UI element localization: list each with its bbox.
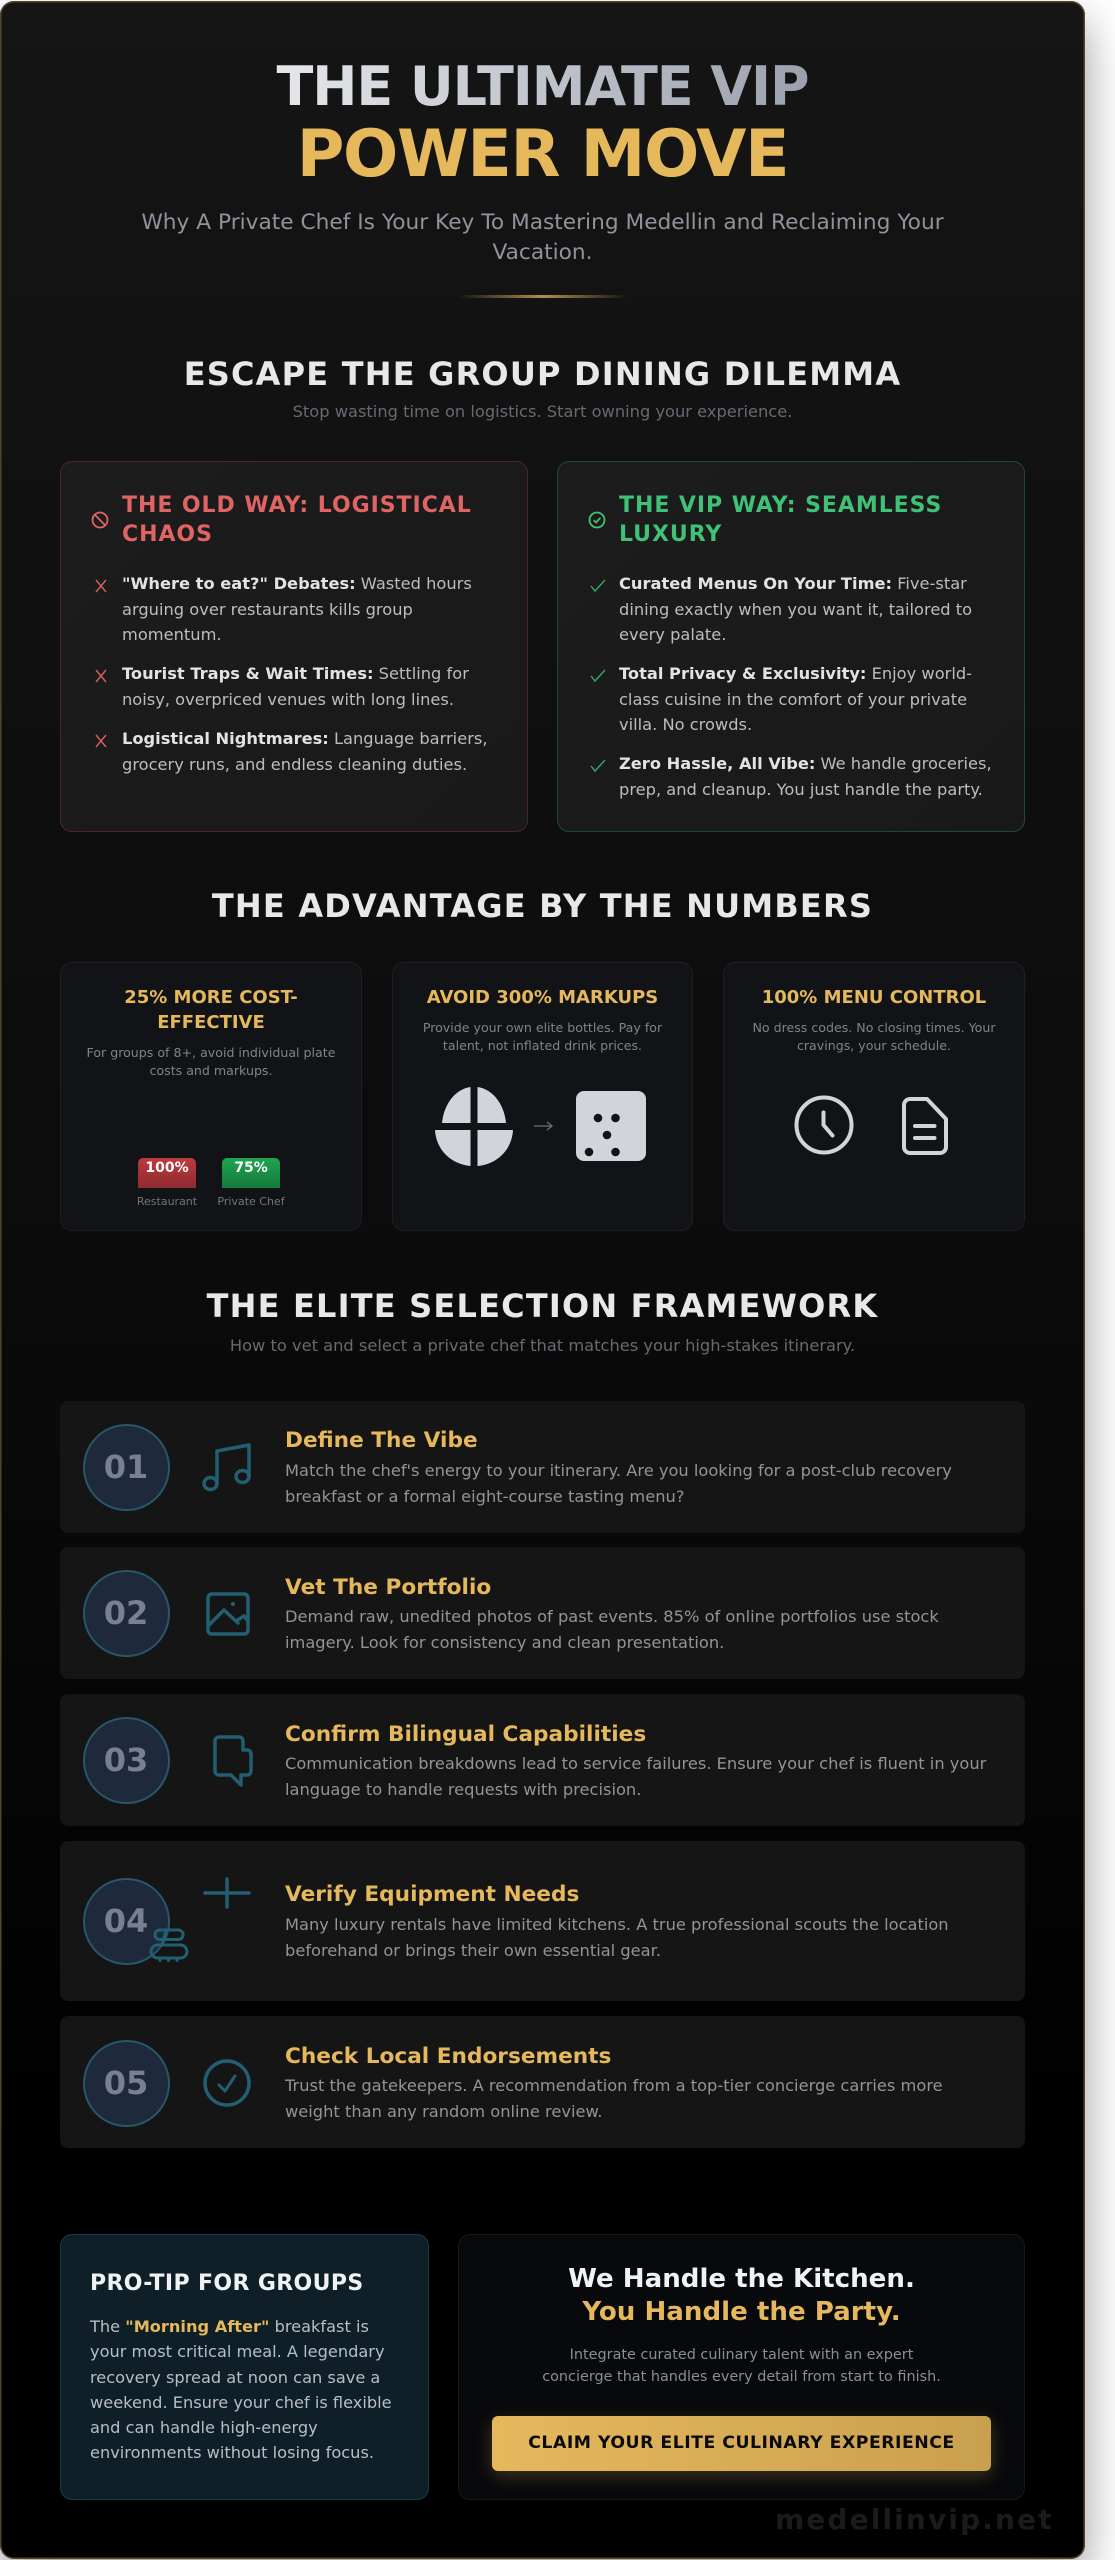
- step title: Check Local Endorsements: [285, 2044, 611, 2068]
- pro-tip heading: PRO-TIP FOR GROUPS: [90, 2271, 364, 2296]
- cta button: CLAIM YOUR ELITE CULINARY EXPERIENCE: [528, 2433, 955, 2453]
- item 3: grocery runs, and endless cleaning duties.: [122, 754, 467, 774]
- stat title: EFFECTIVE: [157, 1012, 265, 1033]
- pro-tip text: and can handle high-energy: [90, 2418, 318, 2437]
- panel: call to action: [458, 2234, 1025, 2500]
- step text: imagery. Look for consistency and clean presentation.: [285, 1633, 724, 1652]
- panel: old way: [60, 461, 528, 832]
- icon: clock: [794, 1096, 854, 1154]
- item 2: Tourist Traps & Wait Times: Settling for: [122, 664, 469, 683]
- number 01: [82, 1424, 170, 1511]
- pro-tip text: [90, 2317, 392, 2462]
- arrow: [534, 1122, 553, 1130]
- stat description: [423, 1020, 662, 1053]
- stat title: 25% MORE COST-: [124, 987, 298, 1008]
- old way title: [122, 492, 472, 546]
- subtitle: Vacation.: [492, 240, 593, 264]
- subtitle: [141, 210, 944, 264]
- item 1: dining exactly when you want it, tailored to: [619, 600, 972, 618]
- check 1: [590, 580, 606, 592]
- step text: Demand raw, unedited photos of past events. 85% of online portfolios use stock: [285, 1607, 939, 1626]
- stat description: cravings, your schedule.: [797, 1038, 951, 1053]
- pro-tip text: weekend. Ensure your chef is flexible: [90, 2393, 392, 2412]
- pro-tip text: your most critical meal. A legendary: [90, 2342, 385, 2361]
- stat card: cost: [60, 962, 362, 1231]
- section heading: framework: THE ELITE SELECTION FRAMEWORK: [207, 1287, 878, 1325]
- item 2: Total Privacy & Exclusivity: Enjoy world-: [619, 664, 972, 683]
- number 04: [82, 1878, 170, 1965]
- stat card: markups: [392, 962, 693, 1231]
- item 1: [122, 574, 472, 644]
- subtitle: Why A Private Chef Is Your Key To Mastering Medellin and Reclaiming Your: [141, 210, 944, 235]
- icon: plate: [435, 1087, 513, 1166]
- icon: music: [202, 1443, 251, 1492]
- section heading: dilemma: ESCAPE THE GROUP DINING DILEMMA: [184, 355, 901, 393]
- step text: Trust the gatekeepers. A recommendation from a top-tier concierge carries more: [285, 2076, 943, 2095]
- step title: Confirm Bilingual Capabilities: [285, 1722, 646, 1746]
- item 3: Logistical Nightmares: Language barriers,: [122, 729, 488, 748]
- stat description: Provide your own elite bottles. Pay for: [423, 1020, 662, 1035]
- private chef label: Private Chef: [217, 1195, 285, 1208]
- icon: check circle: [588, 512, 606, 528]
- restaurant bar: 100%: [145, 1160, 189, 1176]
- item 3: Zero Hassle, All Vibe: We handle groceries,: [619, 754, 992, 773]
- step text: [285, 1754, 986, 1799]
- section heading: numbers: THE ADVANTAGE BY THE NUMBERS: [212, 887, 873, 925]
- old way title: THE OLD WAY: LOGISTICAL: [122, 492, 472, 518]
- stat title: 100% MENU CONTROL: [762, 987, 986, 1008]
- stat title: [124, 987, 298, 1033]
- stat description: [87, 1045, 335, 1078]
- item 3: prep, and cleanup. You just handle the party.: [619, 780, 983, 798]
- step text: Communication breakdowns lead to service failures. Ensure your chef is fluent in your: [285, 1754, 986, 1773]
- stat title: AVOID 300% MARKUPS: [427, 987, 658, 1008]
- vip way title: [619, 492, 942, 546]
- stat description: [752, 1020, 996, 1053]
- step text: Many luxury rentals have limited kitchens. A true professional scouts the location: [285, 1915, 949, 1934]
- item 2: noisy, overpriced venues with long lines.: [122, 690, 454, 708]
- icon: check circle: [203, 2059, 251, 2107]
- step text: language to handle requests with precision.: [285, 1780, 641, 1799]
- step text: [284, 2076, 943, 2121]
- step 3: [60, 1694, 1025, 1826]
- number 04: 04: [104, 1902, 148, 1940]
- number 02: 02: [104, 1594, 148, 1632]
- check 2: [590, 670, 606, 682]
- item 1: "Where to eat?" Debates: Wasted hours: [122, 574, 472, 593]
- number 02: [82, 1570, 170, 1657]
- stat card: control: [723, 962, 1025, 1231]
- private chef bar: 75%: [234, 1160, 268, 1176]
- icon: equipment: [150, 1928, 188, 1962]
- step title: Define The Vibe: [285, 1428, 478, 1453]
- item 1: [619, 574, 972, 644]
- title line 2: POWER MOVE: [297, 116, 788, 192]
- old way title: CHAOS: [122, 522, 213, 546]
- private chef bar: [222, 1158, 280, 1188]
- cta heading: You Handle the Party.: [582, 2297, 901, 2327]
- cta button: [492, 2416, 991, 2471]
- restaurant label: Restaurant: [137, 1195, 197, 1208]
- cta text: Integrate curated culinary talent with an expert: [570, 2347, 913, 2363]
- step text: [285, 1915, 949, 1960]
- icon: dice bottle: [576, 1091, 646, 1161]
- pro-tip text: environments without losing focus.: [90, 2443, 374, 2462]
- check 3: [590, 760, 606, 772]
- step text: breakfast or a formal eight-course tasting menu?: [285, 1487, 684, 1506]
- stat description: costs and markups.: [150, 1063, 272, 1078]
- step title: Vet The Portfolio: [285, 1574, 491, 1600]
- number 03: 03: [104, 1741, 148, 1779]
- item 3: [122, 729, 488, 774]
- pro-tip text: The "Morning After" breakfast is: [90, 2317, 369, 2336]
- step 4: [60, 1841, 1025, 2001]
- mark 2: [96, 670, 106, 682]
- mark 1: [96, 580, 106, 592]
- item 1: Curated Menus On Your Time: Five-star: [619, 574, 967, 593]
- cta text: [458, 2344, 1025, 2388]
- number 05: 05: [104, 2064, 148, 2102]
- step 2: [60, 1547, 1025, 1679]
- section subheading: How to vet and select a private chef that matches your high-stakes itinerary.: [230, 1336, 855, 1355]
- step text: Match the chef's energy to your itinerary. Are you looking for a post-club recovery: [285, 1461, 952, 1480]
- step text: beforehand or brings their own essential gear.: [285, 1941, 661, 1960]
- item 2: [122, 664, 469, 708]
- step text: [285, 1461, 952, 1506]
- header: [141, 55, 944, 298]
- icon: plus: [203, 1877, 251, 1909]
- item 1: every palate.: [619, 625, 726, 644]
- section subheading: Stop wasting time on logistics. Start owning your experience.: [293, 402, 792, 421]
- stat description: For groups of 8+, avoid individual plate: [87, 1045, 335, 1060]
- vip way title: THE VIP WAY: SEAMLESS: [619, 492, 942, 518]
- cta text: concierge that handles every detail from start to finish.: [542, 2369, 941, 2385]
- item 1: arguing over restaurants kills group: [122, 600, 413, 618]
- item 3: [619, 754, 992, 798]
- item 2: villa. No crowds.: [619, 715, 752, 734]
- step 5: [60, 2016, 1025, 2148]
- title line 1: THE ULTIMATE VIP: [276, 55, 808, 118]
- divider: [458, 295, 628, 298]
- panel: pro-tip: [60, 2234, 429, 2500]
- cta heading: [458, 2263, 1025, 2329]
- item 2: class cuisine in the comfort of your private: [619, 690, 967, 708]
- item 1: momentum.: [122, 625, 222, 644]
- number 05: [82, 2040, 170, 2126]
- watermark: medellinvip.net: [775, 2503, 1054, 2536]
- icon: speech bubble: [213, 1735, 253, 1787]
- mark 3: [96, 734, 106, 748]
- step title: Verify Equipment Needs: [285, 1882, 579, 1907]
- stat description: talent, not inflated drink prices.: [443, 1038, 642, 1053]
- vip way title: LUXURY: [619, 522, 722, 546]
- stat description: No dress codes. No closing times. Your: [752, 1020, 996, 1035]
- restaurant bar: [138, 1158, 196, 1188]
- number 03: [82, 1717, 170, 1804]
- item 2: [619, 664, 972, 734]
- icon: image: [206, 1592, 250, 1636]
- cta heading: We Handle the Kitchen.: [568, 2264, 915, 2294]
- icon: document: [902, 1097, 948, 1155]
- step 1: [60, 1401, 1025, 1533]
- panel: vip way: [557, 461, 1025, 832]
- pro-tip text: recovery spread at noon can save a: [90, 2368, 380, 2387]
- number 01: 01: [104, 1448, 148, 1486]
- step text: weight than any random online review.: [285, 2102, 602, 2121]
- step text: [285, 1607, 939, 1652]
- icon: ban: [92, 512, 108, 528]
